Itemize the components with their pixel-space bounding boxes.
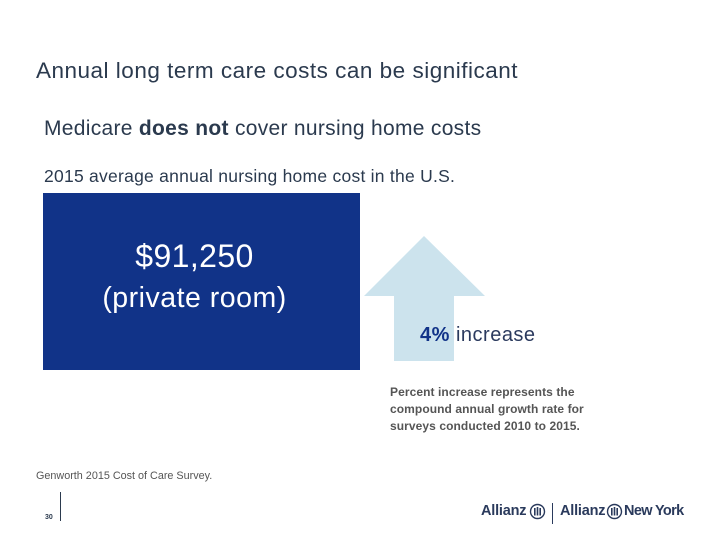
logo icon: Allianz eagle left: [530, 504, 546, 520]
logo divider: [552, 503, 553, 524]
source citation: Genworth 2015 Cost of Care Survey.: [36, 470, 212, 482]
note: percent increase explanation: Percent increase represents the: [390, 385, 575, 399]
callout: 4% increase: 4% increase: [420, 324, 536, 346]
text: average cost label: 2015 average annual nursing home cost in the U.S.: [44, 166, 455, 186]
cost figure: $91,250: [135, 238, 254, 274]
footer rule: [60, 492, 61, 521]
subheading: Medicare: Medicare does not cover nursing home costs: [44, 117, 481, 140]
note: percent increase explanation: [390, 385, 584, 433]
logo icon: Allianz eagle right: [606, 504, 622, 520]
panel: cost box: [43, 193, 360, 370]
note: percent increase explanation: compound annual growth rate for: [390, 402, 584, 416]
note: percent increase explanation: surveys conducted 2010 to 2015.: [390, 419, 580, 433]
cost qualifier: (private room): [102, 282, 287, 314]
logo text: New York: New York: [624, 503, 684, 519]
logo: Allianz and Allianz New York: [481, 503, 684, 524]
page number: 30: [45, 514, 53, 521]
logo text: Allianz: Allianz: [481, 503, 526, 519]
logo text: Allianz second: Allianz: [560, 503, 605, 519]
title: Annual long term care costs can be significant: [36, 58, 518, 83]
